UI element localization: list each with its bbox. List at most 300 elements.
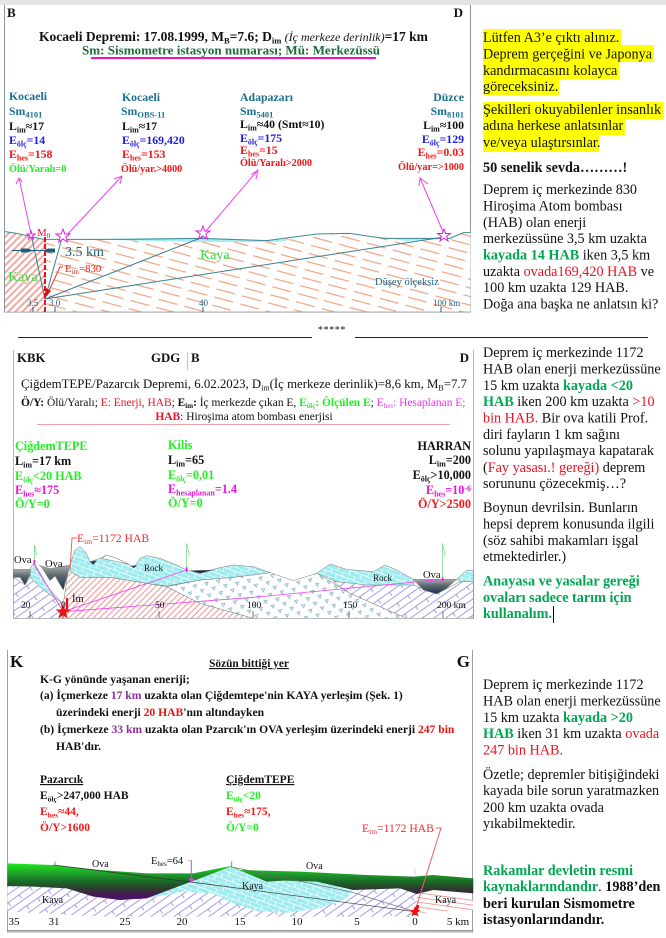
station: HARRAN: im [437,460,446,468]
legend line 1: : [193,397,197,409]
label Ehes=64: hes [157,860,167,868]
legend line 2: HAB: Hiroşima atom bombası enerjisi [155,411,333,423]
rock layers [5,232,471,312]
highlighted note 2: adına herkese anlatsınlar [483,118,624,134]
station: Pazarcık: hes [48,810,58,820]
epicentre dashed line [44,237,46,312]
station: HARRAN: HARRAN [418,439,471,453]
paragraph: Pazarcık summary: solunu yapılaşmaya kapatarak [483,443,655,459]
label M0: 0 [47,232,51,240]
paragraph: Boynun devrilsin: etmektedirler.) [483,549,566,565]
station: Kocaeli 4101: ölç [17,140,27,148]
station: ÇiğdemTEPE: Ö/Y=0 [226,820,259,834]
station: Adapazarı 5401: ≈40 (Smt≈10) [257,117,325,131]
paragraph: Kocaeli summary: uzakta [483,264,524,280]
station: HARRAN: hes [434,490,445,498]
station: Kilis: Ö/Y=0 [168,495,203,510]
station: Kocaeli 4101: L [9,119,17,133]
station: Kilis: hesaplanan [176,488,215,498]
station: Kocaeli 4101: 4101 [25,110,42,120]
subheading: legend: Sm: Sismometre istasyon numarası; Mü: Merkezüssü [82,42,380,58]
station: Düzce 8101: hes [426,152,437,160]
label M0: M [37,227,47,239]
heading: Kocaeli earthquake: B [224,36,230,46]
station: Düzce 8101: 8101 [447,110,464,120]
distance axis labels: 100 km [433,298,460,308]
station: ÇiğdemTEPE: hes [234,810,244,820]
legend line 1: hes [384,402,393,410]
label Eim=830: im [72,268,80,276]
station: Pazarcık: Ö/Y>1600 [40,820,90,834]
paragraph: summary: Özetle; depremler bitişiğindeki [483,767,660,783]
energy arrow [46,267,63,296]
station: ÇiğdemTEPE: ≈175 [34,483,59,497]
station: ÇiğdemTEPE: L [15,454,23,468]
paragraph: Kocaeli summary: merkezüssüne 3,5 km uzakta [483,231,648,247]
paragraph: Pazarcık summary: Fay yasası.! gereği) deprem [488,460,645,476]
direction label G: G [457,652,470,671]
source note: beri kurulan Sismometre [483,896,635,912]
axis ticks [30,611,443,618]
paragraph: Pazarcık summary: kayada <20 [563,378,633,394]
label Eim=1172 HAB: =1172 HAB [92,532,149,545]
magenta rule [91,57,376,59]
paragraph: Pazarcık summary: HAB olan enerji merkezüssüne [483,362,661,378]
label Eim=1172 HAB: im [84,537,92,546]
station: Düzce 8101: ölç [430,138,440,148]
station: Düzce 8101: Sm [431,104,447,118]
paragraph: summary: yıkabilmektedir. [483,816,576,832]
station: Adapazarı 5401: =175 [258,131,282,145]
station: Adapazarı 5401: E [240,131,248,145]
distance axis labels: 5 [354,916,360,928]
legend line 1: ; E [371,397,384,409]
paragraph: K-G summary: HAB olan enerji merkezüssüne [483,694,661,710]
station: HARRAN: ölç [421,474,431,484]
paragraph [40,673,455,753]
station: Adapazarı 5401: L [240,117,248,131]
highlighted note 2: Şekilleri okuyabilenler insanlık [483,102,661,118]
station: Adapazarı 5401: im [248,124,257,132]
highlighted note 1: göreceksiniz. [483,79,558,95]
panel: Çiğdemtepe Pazarcık earthquake [13,350,474,618]
distance axis labels: 15 [234,916,246,928]
paragraph: Pazarcık summary: diri fayların 1 km sağını [483,427,620,443]
rays [33,563,443,612]
station: Kocaeli OBS-11: Sm [121,104,137,118]
highlighted note 1: Lütfen A3’e çıktı alınız. [483,30,619,46]
legend line 1: İç merkezde çıkan E, E [200,397,307,409]
energy arrow [415,905,418,915]
station: Kocaeli 4101 [9,89,66,175]
station: Kocaeli 4101: Ölü/Yaralı=0 [9,162,66,175]
direction label B: B [7,5,16,20]
station: Kilis: Kilis [168,438,193,452]
text column: final notes [483,677,661,928]
station: ÇiğdemTEPE: ÇiğdemTEPE [15,439,87,453]
station: Pazarcık: >247,000 HAB [57,790,129,802]
right basement [333,582,473,618]
small basin under hill [190,570,213,573]
distance axis labels: 0 [412,916,418,928]
source note: . 1988’den [598,879,660,895]
distance axis labels: 3.5 [27,298,39,308]
station: Kocaeli 4101: ≈17 [26,119,44,133]
leader Ehes [187,860,191,862]
label Eim=1172 HAB: =1172 HAB [377,822,434,835]
heading: Kocaeli earthquake: Kocaeli Depremi: 17.08.1999, M [39,29,224,44]
station: HARRAN: E [413,468,421,482]
station: Kilis: =0,01 [186,468,214,482]
station: Kocaeli OBS-11: E [122,133,130,147]
paragraph: Pazarcık summary: ( [483,460,488,476]
distance axis labels: 35 [8,916,20,928]
station: ÇiğdemTEPE: hes [23,490,34,498]
label Ehes=64: =64 [167,856,184,867]
station: Pazarcık: E [40,790,48,802]
triangle layer [167,573,407,618]
blue basement [7,886,417,917]
heading: Kocaeli earthquake: (İç merkeze derinlik) [285,30,385,44]
paragraph: Pazarcık summary: 15 km uzakta [483,378,563,394]
legend line 1: im [185,402,193,410]
magenta markers [34,560,443,581]
station: Kilis: =65 [185,453,204,467]
station: Düzce 8101: L [423,118,431,132]
divider with asterisks: ***** [318,325,346,336]
divider tick [187,352,188,370]
legend line 1: : Hesaplanan E; [393,397,465,409]
rays [53,865,415,912]
heading: Pazarcık earthquake: =7.7 [444,377,468,391]
direction label B: B [191,351,200,365]
legend line 1: ölç [307,402,315,410]
text column: intro notes [483,29,663,312]
panel: Kocaeli earthquake [4,5,471,312]
distance axis labels: 25 [120,916,131,928]
source note: Rakamlar devletin resmi [483,863,633,879]
station: HARRAN: Ö/Y>2500 [418,496,471,511]
label Eim=1172 HAB: E [77,532,84,545]
station: Kocaeli 4101: hes [17,154,28,162]
station: Pazarcık [40,774,129,834]
heading: Pazarcık earthquake: (İç merkeze derinlik)=8,6 km, M [270,377,439,391]
station: Adapazarı 5401: E [240,143,248,157]
distance axis labels [27,298,460,308]
distance axis labels: 5 km [447,916,470,928]
green flags [34,543,445,578]
bold note: 50 senelik sevda………! [483,160,627,176]
leader Eim [416,828,441,908]
station: HARRAN: >10,000 [431,468,471,482]
station: HARRAN [413,439,471,511]
label Ova: Ova [92,859,109,870]
paragraph: K-G summary: . [559,742,563,758]
paragraph: Kocaeli summary: ovada169,420 HAB ve [524,264,654,280]
green bold note: kullanalım. [483,606,552,622]
paragraph: K-G yönünde yaşanan eneriji; [40,673,190,686]
source note: kaynaklarındandır [483,879,598,895]
station: HARRAN: =200 [446,453,471,467]
heading: Kocaeli earthquake: =17 km [385,29,428,44]
station: ÇiğdemTEPE: ≈175, [244,806,271,818]
station: Düzce 8101: Ölü/yar=>1000 [398,160,464,173]
green ova layer [7,863,473,900]
paragraph: summary: kayada bile sorun yaratmazken [483,783,659,799]
direction label K: K [10,652,24,671]
legend line 1: : Ölçülen E [315,395,371,409]
label Im: İm [72,593,84,605]
label Kaya: Kaya [435,895,457,906]
leader Eim [70,538,77,570]
heading: Kocaeli earthquake: =7.6; D [230,29,272,44]
station: Kocaeli OBS-11: Ölü/yar.>4000 [121,162,182,175]
station: Kocaeli 4101: Sm [9,104,25,118]
highlighted note 1: Deprem gerçeğini ve Japonya [483,46,653,62]
distance axis labels: 31 [48,916,60,928]
station: Düzce 8101: E [418,145,426,159]
label Ova: Ova [45,559,63,570]
station: HARRAN: =10 [445,483,464,497]
axis ticks [33,307,441,312]
station: Kocaeli OBS-11: =169,420 [140,133,185,147]
axis [7,929,473,932]
station: ÇiğdemTEPE: ölç [23,476,33,484]
paragraph: Boynun devrilsin: hepsi deprem konusunda ilgili [483,516,654,532]
label Kaya: Kaya [42,895,64,906]
left basement [13,577,63,618]
seismic rays [31,234,444,299]
paragraph: Kocaeli summary: iken 3,5 km [579,248,650,264]
highlighted note 1: kandırmacasını kolayca [483,63,618,79]
station: Kocaeli OBS-11: im [130,126,139,134]
direction label D: D [454,5,463,20]
paragraph: Kocaeli summary: (HAB) olan enerji [483,215,586,231]
paragraph: K-G summary: HAB [483,726,514,742]
markers [55,860,232,879]
paragraph: Boynun devrilsin: Boynun devrilsin. Bunların [483,500,638,516]
station: HARRAN: -6 [464,484,471,493]
station: Düzce 8101: =129 [440,132,464,146]
station: Kocaeli 4101: Kocaeli [9,89,48,103]
paragraph: Pazarcık summary: bin HAB. [483,410,538,426]
label Ova: Ova [14,555,32,566]
station: Düzce 8101 [398,90,464,173]
station: Kocaeli OBS-11: L [122,119,130,133]
distance axis labels: 200 km [437,601,466,611]
station: Kocaeli 4101: E [9,133,17,147]
distance axis labels: 150 [343,601,358,611]
legend line 1: Ö/Y: Ölü/Yaralı; E: Enerji, HAB; E [21,397,185,409]
paragraph: Pazarcık summary: sorununu çözecekmiş…? [483,476,626,492]
heading: Sözün bittiği yer [209,658,289,670]
label Kaya: Kaya [242,881,264,892]
brick rock [147,867,353,913]
station: Kilis: L [168,453,176,467]
panel: Sözün bittiği yer [7,650,473,932]
yellow highlights [483,29,663,152]
epicentre star [410,906,420,917]
station: HARRAN: L [429,453,437,467]
station: Kocaeli OBS-11: E [122,147,130,161]
station: Düzce 8101: =0.03 [437,145,464,159]
station: Kocaeli OBS-11: OBS-11 [137,110,165,120]
station: Pazarcık: E [40,806,48,818]
station: Kocaeli OBS-11: ölç [130,140,140,148]
paragraph: K-G summary: kayada >20 [563,710,633,726]
paragraph: Pazarcık summary: HAB [483,394,514,410]
station: Adapazarı 5401: Ölü/Yaralı>2000 [240,156,312,169]
station: Kocaeli 4101: =14 [27,133,45,147]
heading: Kocaeli earthquake: im [272,36,281,46]
pink rule [37,424,450,425]
paragraph: Kocaeli summary: Deprem iç merkezinde 830 [483,182,637,198]
paragraph: K-G summary: 247 bin HAB [483,742,559,758]
paragraph: K-G summary: Deprem iç merkezinde 1172 [483,677,644,693]
station: Kocaeli OBS-11: =153 [141,147,166,161]
station: Adapazarı 5401: hes [248,150,259,158]
station: Pazarcık: ölç [48,794,58,804]
label Rock: Rock [144,563,163,573]
label Eim=830: E [65,263,72,275]
station: Adapazarı 5401: Adapazarı [240,90,294,104]
station: Pazarcık: Pazarcık [40,774,84,786]
station: Düzce 8101: E [422,132,430,146]
text cursor [553,606,554,623]
label vertical scale: Düşey ölçeksiz [375,277,439,288]
brick rock [30,563,63,603]
direction label GDG: GDG [151,351,180,365]
paragraph: Pazarcık summary: Bir ova katili Prof. [538,410,648,426]
paragraph: K-G summary: iken 31 km uzakta ovada [517,726,659,742]
station: Kocaeli 4101: im [17,126,26,134]
label 3.5 km: 3.5 km [65,245,104,260]
source note: istasyonlarındandır. [483,912,604,928]
station: HARRAN: E [426,483,434,497]
paragraph: (b) İçmerkeze 33 km uzakta olan Pzarcık'ın OVA yerleşim üzerindeki enerji 247 bin [40,722,455,736]
station: Adapazarı 5401: ölç [248,138,258,146]
distance arrow 3.5 km [12,248,55,252]
station: ÇiğdemTEPE [226,774,295,834]
distance axis labels: 20 [176,916,188,928]
station: Kilis: E [168,468,176,482]
right ova basin [413,579,457,594]
paragraph: üzerindeki enerji 20 HAB'nın altındayken [56,706,265,719]
station: ÇiğdemTEPE: E [226,806,234,818]
distance axis labels: 40 [199,298,208,308]
station: ÇiğdemTEPE: Ö/Y=0 [15,496,50,511]
distance axis labels: 10 [292,916,303,928]
left ova basins [13,569,32,585]
highlighted note 2: ve/veya ulaştırsınlar. [483,135,600,151]
magenta leaders to stations [16,170,444,238]
distance axis labels: 3.0 [49,298,61,308]
top window bar [0,0,666,5]
epicentre star [56,604,70,618]
station: Kocaeli 4101: E [9,147,17,161]
label Ehes=64: E [151,856,157,867]
station: ÇiğdemTEPE: <20 [243,790,261,802]
paragraph: Kocaeli summary: 100 km uzakta 129 HAB. [483,280,628,296]
station stars [27,226,450,242]
chart: K-G cross-section [7,822,473,931]
station: ÇiğdemTEPE: im [23,460,32,470]
station: Kocaeli OBS-11: Kocaeli [122,90,161,104]
station: Kilis: ölç [176,474,186,484]
paragraph: Boynun devrilsin: (söz sahibi makamları işgal [483,533,639,549]
label Kaya left: Kaya [8,270,38,285]
label Ova: Ova [423,570,441,581]
paragraph: Kocaeli summary: kayada 14 HAB [483,248,580,264]
red hatched rock [63,570,253,618]
distance axis labels: 0 [61,601,66,611]
green bold note: ovaları sadece tarım için [483,590,632,606]
station: Adapazarı 5401: =15 [259,143,278,157]
station: Düzce 8101: ≈100 [440,118,464,132]
paragraph: Pazarcık summary: iken 200 km uzakta >10 [517,394,655,410]
station: Adapazarı 5401: Sm [240,104,256,118]
distance axis labels [21,601,466,611]
station: ÇiğdemTEPE: =17 km [32,454,71,468]
station: Kocaeli OBS-11: ≈17 [139,119,157,133]
arrow Im [66,598,68,610]
station: ÇiğdemTEPE: E [15,469,23,483]
station: Kilis [168,438,237,510]
label Kaya center: Kaya [200,248,230,263]
red hatched rock [417,891,473,913]
text column: Pazarcık notes [483,345,661,623]
chart: Pazarcık cross-section [13,532,473,618]
station: ÇiğdemTEPE: E [15,483,23,497]
distance axis labels: 100 [247,601,262,611]
paragraph: (a) İçmerkeze 17 km uzakta olan Çiğdemtepe'nin KAYA yerleşim (Şek. 1) [40,688,403,702]
paragraph: Kocaeli summary: Doğa ana başka ne anlatsın ki? [483,296,658,312]
label Eim=1172 HAB: E [362,822,369,835]
station: Düzce 8101: Düzce [433,90,464,104]
direction label KBK: KBK [17,351,45,365]
station: ÇiğdemTEPE [15,439,87,511]
paragraph: Pazarcık summary: Deprem iç merkezinde 1172 [483,345,644,361]
paragraph: Kocaeli summary: Hiroşima Atom bombası [483,198,623,214]
distance axis labels: 50 [155,601,165,611]
station: ÇiğdemTEPE: <20 HAB [33,469,82,483]
heading: Pazarcık earthquake: ÇiğdemTEPE/Pazarcık Depremi, 6.02.2023, D [21,377,261,391]
heading: Pazarcık earthquake: im [261,384,270,392]
station: Kilis: E [168,482,176,496]
paragraph: HAB'dır. [56,740,101,753]
station: ÇiğdemTEPE: ölç [234,794,244,804]
paragraph: summary: 200 km uzakta ovada [483,800,605,816]
station: Adapazarı 5401 [240,90,325,169]
station: Pazarcık: ≈44, [58,806,79,818]
heading: Pazarcık earthquake: B [438,384,444,392]
station: Kilis: =1.4 [215,482,237,496]
station: Kocaeli OBS-11: hes [130,154,141,162]
station: Düzce 8101: im [431,124,440,134]
distance axis labels: 20 [21,601,31,611]
station: Kilis: im [176,460,185,468]
station: Kocaeli OBS-11 [121,90,185,175]
green bold note: Anayasa ve yasalar gereği [483,574,640,590]
label Eim=1172 HAB: im [369,827,377,836]
station: ÇiğdemTEPE: ÇiğdemTEPE [226,774,295,786]
distance axis labels [8,916,470,928]
label Ova: Ova [306,861,323,872]
direction label D: D [460,351,469,365]
chart: Kocaeli cross-section [5,170,471,312]
label Rock: Rock [373,573,392,583]
station: Kocaeli 4101: =158 [28,147,53,161]
